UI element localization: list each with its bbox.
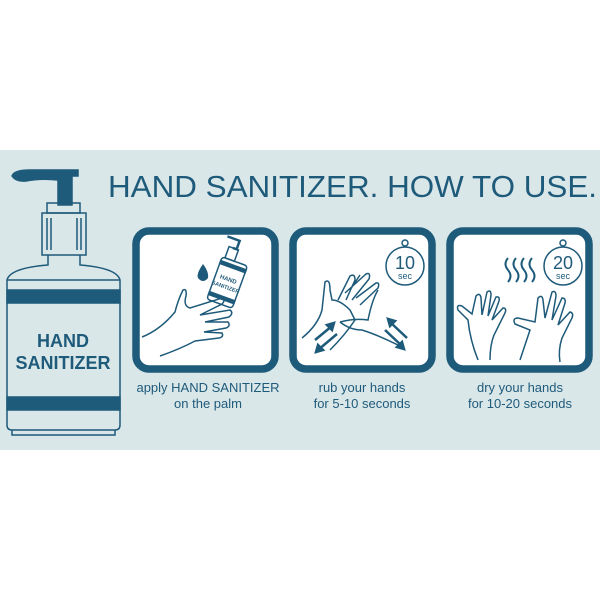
caption 1: apply HAND SANITIZER — [136, 380, 280, 395]
background band — [0, 150, 600, 450]
icon: arrows — [315, 319, 407, 352]
icon: timer 20 sec: 20 — [553, 253, 573, 273]
text: for 5-10 seconds — [314, 396, 411, 411]
text: on the palm — [174, 396, 242, 411]
icon: rubbing hands — [302, 274, 400, 350]
bottle label: HAND — [37, 331, 89, 351]
bottle — [7, 170, 120, 435]
icon: timer 10 sec: sec — [398, 271, 412, 281]
icon: two hands — [458, 291, 573, 362]
icon: small bottle: SANITIZER — [211, 280, 240, 296]
panel 2: rub — [293, 231, 432, 369]
title: HAND SANITIZER. HOW TO USE. — [108, 169, 597, 204]
panel 3: dry — [450, 231, 589, 369]
icon: small bottle: HAND — [219, 274, 238, 286]
icon: heat waves — [506, 258, 534, 282]
icon: drop — [198, 264, 208, 281]
icon: timer 10 sec — [386, 240, 424, 285]
caption 2: rub your hands — [319, 380, 406, 395]
text: for 10-20 seconds — [468, 396, 573, 411]
icon: timer 10 sec: 10 — [395, 253, 415, 273]
icon: timer 20 sec: sec — [556, 271, 570, 281]
panel 1: apply — [136, 231, 275, 369]
icon: hand — [142, 290, 232, 356]
icon: small bottle — [205, 236, 256, 309]
icon: timer 20 sec — [544, 240, 582, 285]
caption 3: dry your hands — [477, 380, 563, 395]
bottle label line 2: SANITIZER — [15, 353, 111, 373]
